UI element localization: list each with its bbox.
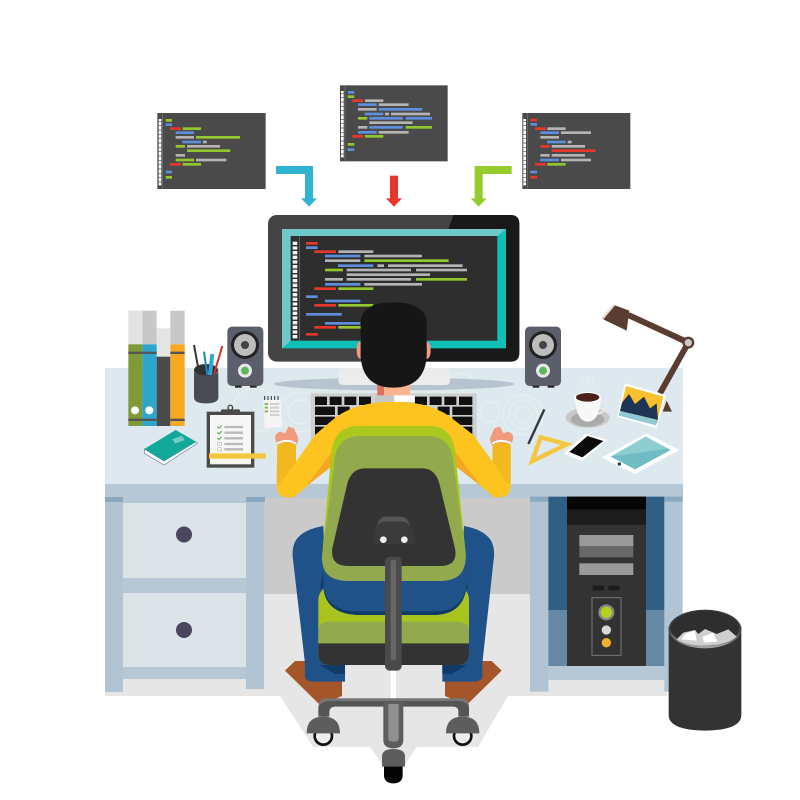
monitor stand shadow	[274, 378, 514, 390]
caster: right	[446, 717, 479, 746]
hands	[275, 427, 513, 448]
desk edge	[105, 484, 683, 498]
speaker: left	[227, 327, 263, 388]
caster: left	[307, 717, 340, 746]
desk top	[105, 368, 683, 484]
shoes	[285, 661, 502, 705]
chair stem	[385, 557, 402, 671]
smartphone	[564, 433, 608, 461]
seat cushion	[318, 587, 469, 665]
waste bin	[669, 610, 741, 731]
crumpled paper	[677, 629, 737, 646]
code panels and arrows	[157, 85, 630, 207]
pen cup	[194, 345, 222, 403]
lap	[323, 567, 467, 615]
screen	[291, 236, 497, 341]
right speaker and desk items	[525, 304, 694, 474]
green notebook	[144, 430, 197, 465]
set square	[532, 437, 567, 461]
wall under desk	[264, 498, 532, 594]
floor	[105, 594, 667, 764]
computer tower	[567, 497, 646, 666]
drawer: top	[123, 503, 246, 578]
cabinet with computer tower	[530, 497, 683, 692]
speaker: right	[525, 327, 561, 388]
ruler	[209, 453, 266, 459]
drawer: bottom	[123, 593, 246, 668]
ears	[357, 342, 431, 359]
tablet	[602, 433, 679, 474]
arrow: green	[471, 166, 512, 207]
sweater	[277, 402, 511, 497]
caster: front	[382, 749, 405, 783]
clipboard	[207, 405, 266, 468]
pen	[528, 409, 544, 444]
head	[357, 302, 431, 402]
code panel: centre	[340, 85, 448, 161]
desk lamp	[601, 304, 694, 412]
monitor	[268, 215, 519, 390]
screen code lines	[306, 242, 467, 336]
arrow: cyan	[276, 166, 317, 207]
coffee cup	[566, 376, 610, 428]
keyboard	[311, 393, 477, 440]
centre column	[383, 702, 403, 748]
code panel: left	[157, 113, 266, 189]
screen frame	[282, 229, 506, 348]
drawer unit	[105, 497, 265, 692]
monitor stand	[338, 368, 450, 385]
notepad	[263, 396, 282, 428]
faint watermark swirls	[233, 373, 543, 435]
trousers	[293, 526, 494, 682]
chair back	[322, 426, 466, 581]
arrow: red	[386, 176, 402, 207]
code panel: right	[522, 113, 630, 189]
neck	[375, 382, 414, 402]
person and chair	[275, 402, 513, 783]
left speaker and desk items	[128, 311, 282, 468]
photo print	[617, 383, 666, 428]
books	[128, 311, 185, 426]
hair	[361, 302, 427, 388]
chair base	[307, 557, 479, 783]
